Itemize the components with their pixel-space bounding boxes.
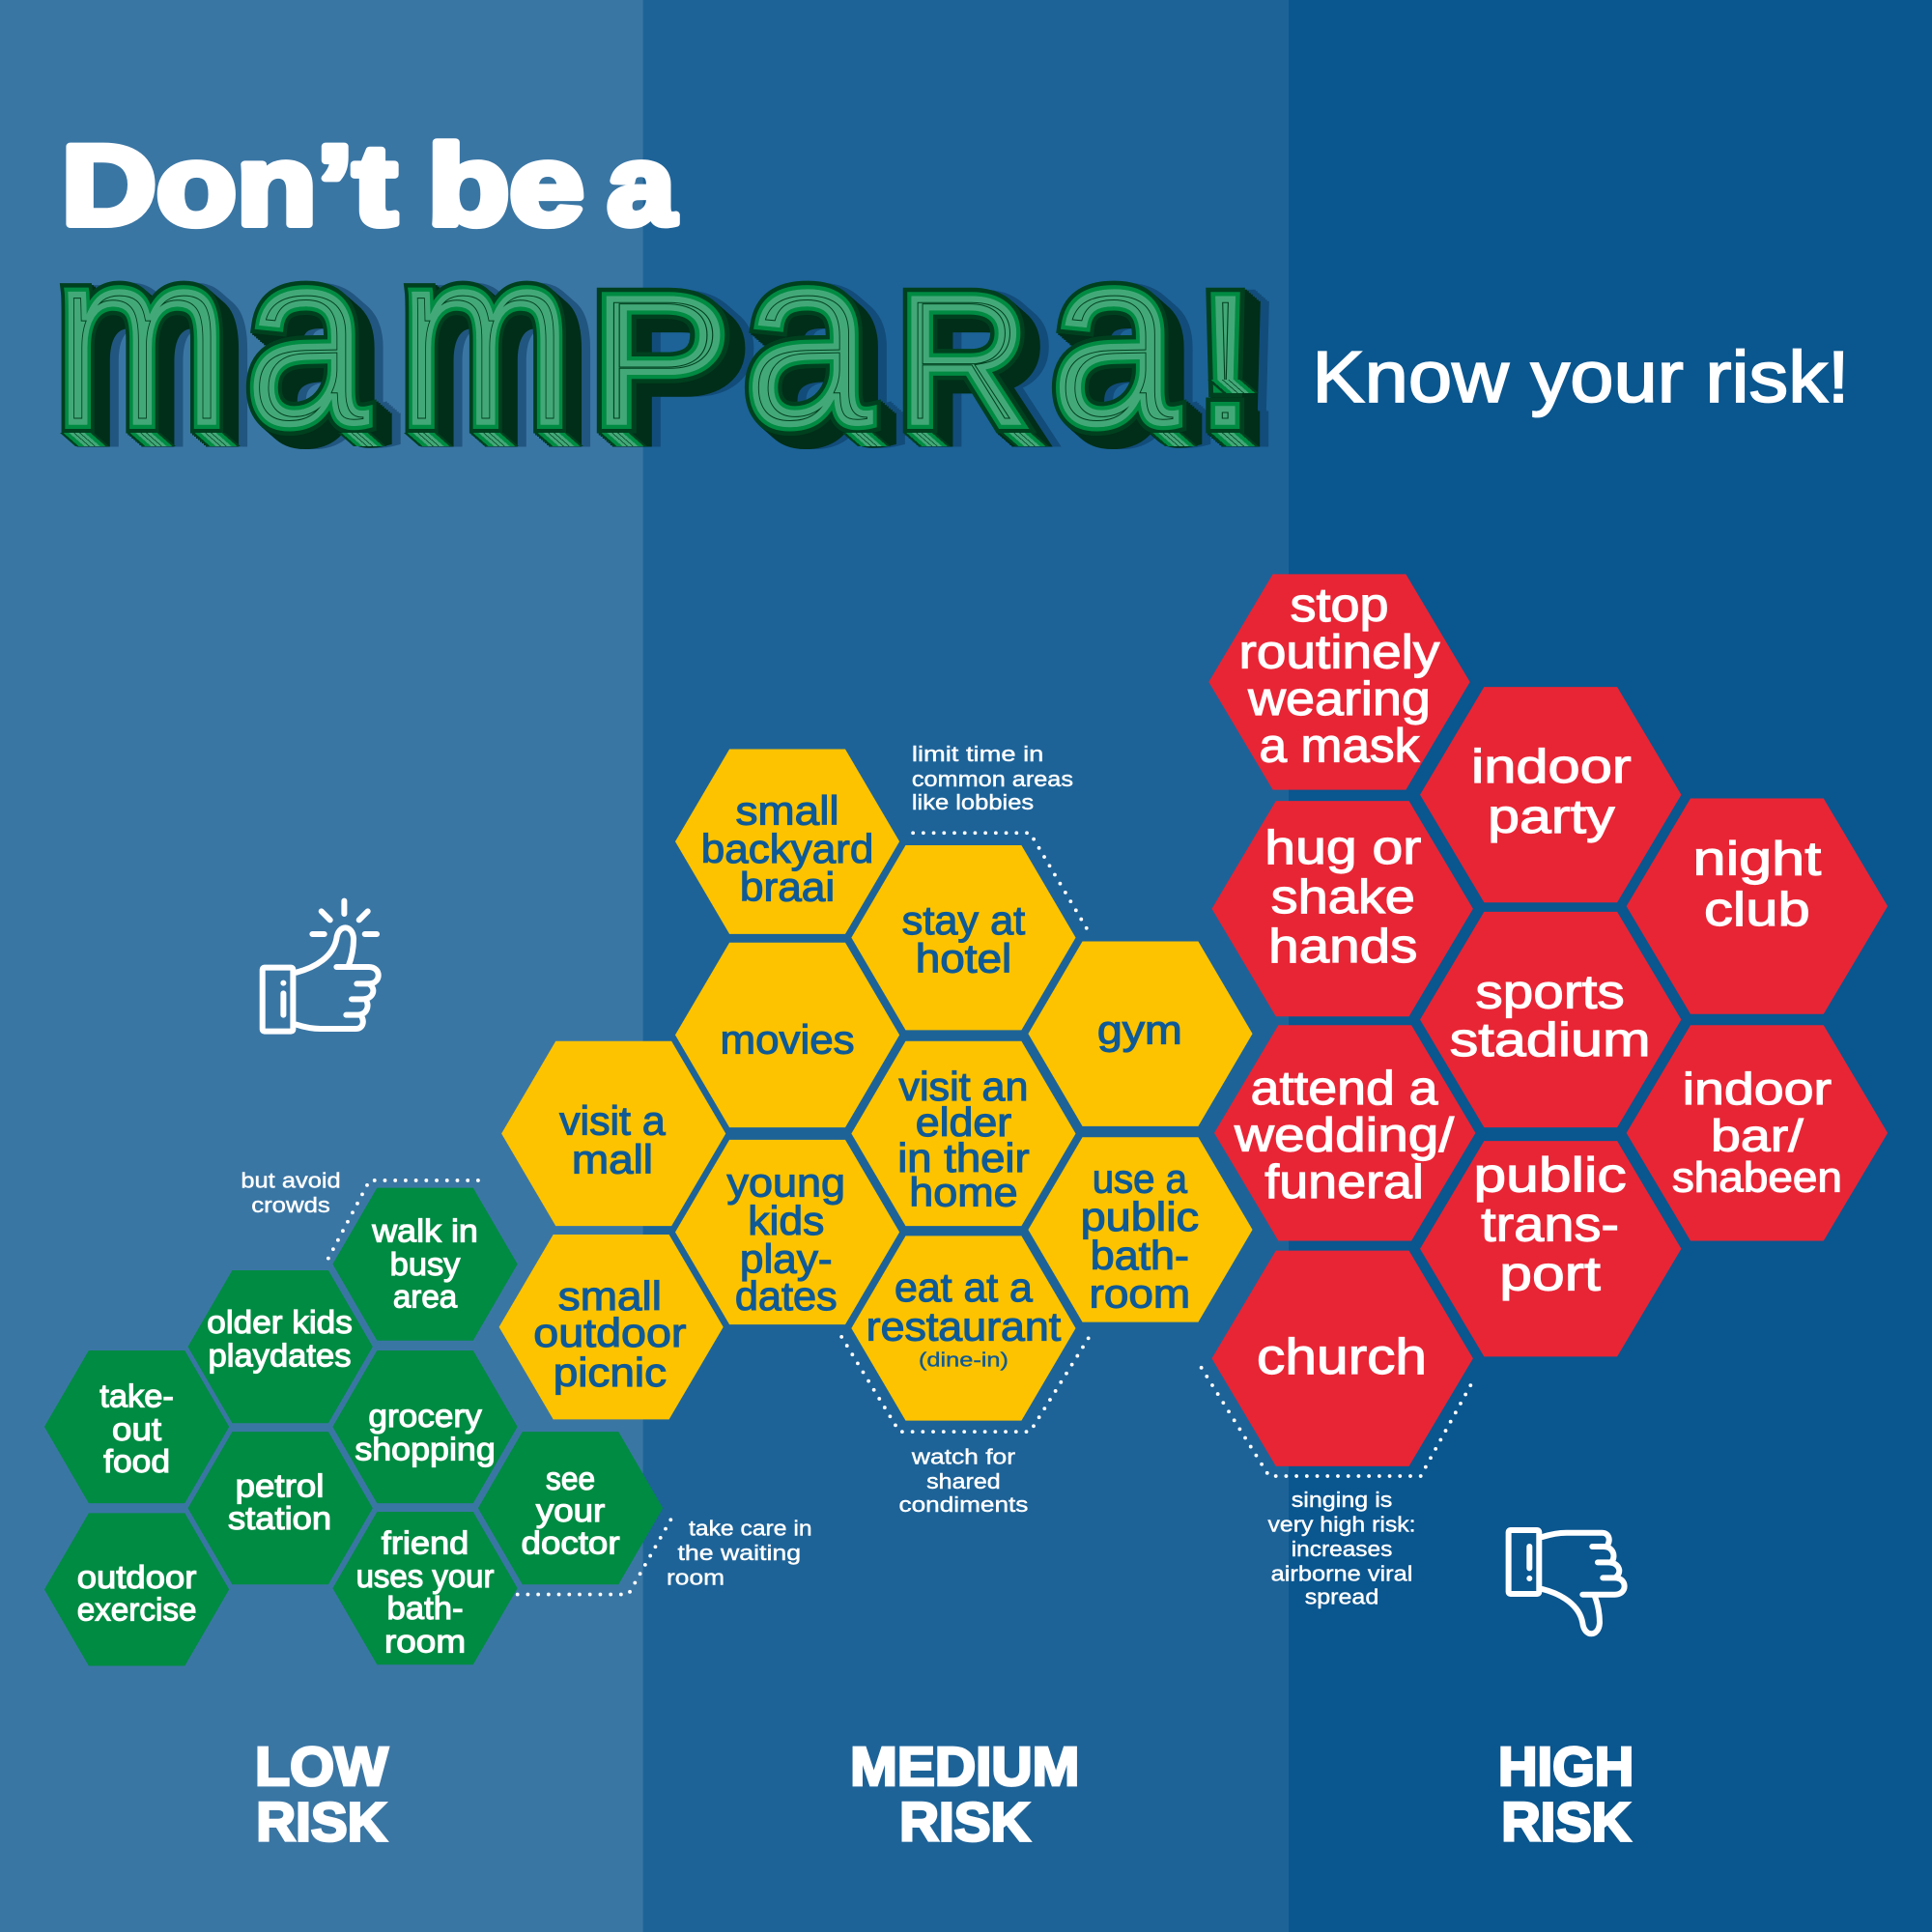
callout: but avoid crowds: crowds: [251, 1193, 330, 1217]
light band over pinstripe: a: [244, 198, 369, 478]
panel: high risk background: [1289, 0, 1932, 1932]
heading: high risk: [1498, 1736, 1634, 1853]
hex: attend a wedding/funeral: [1214, 1025, 1475, 1240]
callout: limit time in common areas: like lobbies: [912, 790, 1034, 814]
hex: outdoor exercise: [44, 1513, 229, 1665]
hex: petrol station: [188, 1432, 373, 1584]
callout: singing is very high risk: increases: [1292, 1537, 1392, 1561]
hex: friend uses your bathroom: room: [384, 1624, 466, 1660]
hex: visit an elder in their home: elder: [916, 1099, 1011, 1145]
hex: stop routinely wearing a mask: stop: [1290, 580, 1388, 632]
letter faces with extrusion and shadow: [60, 280, 1269, 449]
title: MAMPARA! striped lettering: [60, 280, 1269, 449]
light centre band: P: [589, 256, 731, 465]
hex: public transport: trans-: [1481, 1196, 1619, 1251]
hex: stay at hotel: [851, 845, 1076, 1030]
hex: young kids play-dates: young: [727, 1160, 845, 1206]
hex: outdoor exercise: outdoor: [77, 1560, 196, 1596]
hex: older kids playdates: playdates: [209, 1339, 352, 1375]
mid green band: a: [244, 198, 369, 478]
hex: friend uses your bathroom: friend: [382, 1525, 469, 1561]
hex: stay at hotel: stay at: [902, 897, 1026, 943]
hex: small backyard braai: [675, 750, 899, 934]
light centre band: a: [1050, 197, 1179, 478]
outer dark rim: m: [54, 198, 230, 478]
hex: hug or shake hands: hands: [1268, 921, 1417, 973]
heading: medium risk: [850, 1736, 1079, 1853]
mid green band: m: [398, 197, 573, 478]
hex: indoor bar/shabeen: shabeen: [1672, 1154, 1842, 1201]
hex: stop routinely wearing a mask: wearing: [1247, 673, 1431, 725]
outer dark rim: [54, 197, 1254, 478]
hexagon cluster: low risk: [44, 1188, 663, 1665]
hex: eat at a restaurant (dine-in): eat at a: [895, 1264, 1034, 1310]
hex: see your doctor: doctor: [522, 1525, 620, 1561]
hex: visit a mall: mall: [572, 1136, 653, 1181]
mid green band: a: [743, 198, 873, 478]
outer dark rim: a: [743, 198, 873, 478]
callout: limit time in common areas: limit time in: [912, 742, 1043, 766]
dark pinstripe: R: [896, 256, 1030, 465]
hex: sports stadium: stadium: [1450, 1014, 1651, 1066]
heading: low risk: LOW: [255, 1736, 388, 1797]
hex: take-out food: [44, 1350, 229, 1503]
hex: stay at hotel: hotel: [916, 935, 1011, 980]
hex: young kids play-dates: dates: [735, 1273, 838, 1319]
hex: night club: night: [1693, 834, 1822, 886]
callout: but avoid crowds: but avoid: [241, 1169, 341, 1193]
icon: thumbs down: [1509, 1530, 1625, 1634]
hex: walk in busy area: [332, 1188, 518, 1341]
dark pinstripe: a: [1050, 197, 1179, 478]
callout: take care in the waiting room: the waiting: [678, 1541, 801, 1565]
hex: visit an elder in their home: [851, 1041, 1076, 1226]
light centre band: R: [896, 256, 1030, 465]
hex: indoor bar/shabeen: indoor: [1683, 1064, 1832, 1114]
hex: night club: [1627, 799, 1888, 1014]
dark pinstripe: [73, 296, 1229, 421]
hex: hug or shake hands: hug or: [1264, 822, 1421, 874]
dark pinstripe: a: [743, 198, 873, 478]
outer dark rim: m: [398, 197, 573, 478]
light centre band: m: [398, 197, 573, 478]
dark pinstripe: a: [244, 198, 369, 478]
hex: small outdoor picnic: small: [558, 1273, 662, 1319]
title: Don't be a: a: [608, 122, 676, 248]
heading: medium risk: RISK: [899, 1792, 1030, 1853]
heading: medium risk: MEDIUM: [850, 1736, 1079, 1797]
hex: hug or shake hands: shake: [1271, 871, 1415, 923]
hex: outdoor exercise: exercise: [77, 1592, 196, 1628]
hexagon cluster: high risk: [1208, 574, 1888, 1466]
hex: older kids playdates: [188, 1270, 373, 1423]
hex: eat at a restaurant (dine-in): restaurant: [867, 1304, 1062, 1350]
panel: medium risk background: [643, 0, 1289, 1932]
dark pinstripe: m: [398, 197, 573, 478]
hex: use a public bathroom: bath-: [1091, 1233, 1189, 1278]
light band over pinstripe: !: [1197, 255, 1254, 464]
hex: small outdoor picnic: picnic: [554, 1350, 667, 1395]
light centre band: [54, 197, 1254, 478]
hex: indoor party: indoor: [1471, 741, 1632, 793]
light band over pinstripe: R: [896, 256, 1030, 465]
hex: walk in busy area: walk in: [371, 1214, 478, 1250]
light band over pinstripe: m: [398, 197, 573, 478]
callout: singing is very high risk: [1202, 1368, 1475, 1609]
light band over pinstripe: P: [589, 256, 731, 465]
hex: movies: [675, 943, 899, 1127]
callout: watch for shared condiments: watch for: [911, 1444, 1016, 1468]
hex: public transport: port: [1499, 1245, 1601, 1300]
hex: friend uses your bathroom: [332, 1512, 518, 1664]
hex: attend a wedding/funeral: attend a: [1251, 1063, 1438, 1115]
dark pinstripe: !: [1197, 255, 1254, 464]
hex: young kids play-dates: [675, 1140, 899, 1324]
callout: take care in the waiting room: [518, 1512, 812, 1595]
hex: stop routinely wearing a mask: [1208, 574, 1470, 790]
hex: friend uses your bathroom: uses your: [356, 1559, 494, 1595]
callout: limit time in common areas: common areas: [912, 767, 1073, 791]
dark pinstripe: m: [54, 198, 230, 478]
mid green band: R: [896, 256, 1030, 465]
callout: watch for shared condiments: condiments: [898, 1492, 1028, 1517]
hex: church: church: [1257, 1328, 1427, 1384]
hexagon cluster: medium risk: [499, 750, 1253, 1421]
hex: visit an elder in their home: in their: [897, 1135, 1030, 1180]
light band over pinstripe: a: [743, 198, 873, 478]
hex: friend uses your bathroom: bath-: [387, 1591, 464, 1627]
hex: small backyard braai: braai: [740, 864, 835, 909]
callout: singing is very high risk: very high risk:: [1267, 1512, 1416, 1536]
title: Don't be a: [62, 122, 676, 248]
subtitle: Know your risk!: Know your risk!: [1312, 336, 1850, 417]
hex: use a public bathroom: public: [1081, 1194, 1199, 1239]
hex: indoor party: party: [1488, 791, 1615, 843]
outer dark rim: R: [896, 256, 1030, 465]
callout: singing is very high risk: airborne viral: [1271, 1561, 1412, 1585]
mid green band: [54, 197, 1254, 478]
callout: take care in the waiting room: room: [667, 1565, 724, 1589]
hex: see your doctor: see: [546, 1462, 595, 1497]
icon: thumbs up: [263, 901, 379, 1032]
callout: watch for shared condiments: shared: [926, 1469, 1001, 1493]
hex: see your doctor: your: [536, 1493, 605, 1529]
hex: use a public bathroom: [1028, 1137, 1253, 1322]
hex: indoor bar/shabeen: bar/: [1711, 1110, 1804, 1160]
hex: visit an elder in their home: home: [909, 1170, 1018, 1215]
hex: gym: gym: [1097, 1007, 1182, 1052]
light band over pinstripe: m: [54, 198, 230, 478]
hex: young kids play-dates: kids: [748, 1198, 824, 1243]
hex: small backyard braai: small: [735, 787, 839, 833]
light band over pinstripe: a: [1050, 197, 1179, 478]
hex: hug or shake hands: [1211, 801, 1473, 1016]
title: Don't be a: be: [428, 122, 584, 248]
panel: low risk background: [0, 0, 643, 1932]
hex: walk in busy area: area: [393, 1279, 458, 1315]
hex: indoor party: [1420, 687, 1681, 902]
hex: attend a wedding/funeral: funeral: [1264, 1156, 1424, 1208]
hex: petrol station: station: [228, 1501, 331, 1537]
mid green band: P: [589, 256, 731, 465]
hex: older kids playdates: older kids: [207, 1305, 353, 1341]
hex: attend a wedding/funeral: wedding/: [1234, 1109, 1455, 1161]
title: Don't be a: Don’t: [62, 122, 397, 248]
mid green band: m: [54, 198, 230, 478]
thin inner lines: [73, 292, 1229, 421]
hex: movies: movies: [721, 1017, 855, 1063]
hex: visit a mall: [501, 1041, 725, 1226]
hex: eat at a restaurant (dine-in): (dine-in): [919, 1350, 1009, 1372]
heading: low risk: RISK: [256, 1792, 387, 1853]
callout: watch for shared condiments: [841, 1337, 1090, 1517]
outer dark rim: P: [589, 256, 731, 465]
hex: stop routinely wearing a mask: a mask: [1260, 720, 1420, 772]
hex: use a public bathroom: use a: [1093, 1156, 1188, 1202]
callout: singing is very high risk: spread: [1305, 1585, 1378, 1609]
callout: but avoid crowds: [241, 1169, 478, 1262]
hex: night club: club: [1704, 884, 1810, 936]
hex: visit a mall: visit a: [559, 1098, 667, 1144]
hex: walk in busy area: busy: [390, 1247, 461, 1283]
callout: take care in the waiting room: take care in: [689, 1516, 812, 1540]
hex: take-out food: take-: [99, 1379, 174, 1415]
outer dark rim: a: [244, 198, 369, 478]
outer dark rim: a: [1050, 197, 1179, 478]
callout: limit time in common areas: [912, 742, 1090, 933]
hex: grocery shopping: shopping: [355, 1432, 496, 1467]
hex: stop routinely wearing a mask: routinely: [1239, 626, 1440, 678]
hex: sports stadium: sports: [1475, 966, 1625, 1018]
callout: singing is very high risk: singing is: [1292, 1488, 1392, 1512]
hex: sports stadium: [1420, 912, 1681, 1127]
hex: small outdoor picnic: [499, 1235, 724, 1419]
striped bottom faces of letter stems: [60, 380, 1259, 446]
light centre band: m: [54, 198, 230, 478]
hex: church: [1211, 1251, 1473, 1466]
hex: gym: [1028, 941, 1253, 1126]
hex: small backyard braai: backyard: [701, 826, 873, 871]
hex: public transport: [1420, 1141, 1681, 1356]
hex: indoor bar/shabeen: [1627, 1025, 1888, 1240]
outer dark rim: !: [1197, 255, 1254, 464]
heading: high risk: RISK: [1501, 1792, 1631, 1853]
hex: young kids play-dates: play-: [740, 1236, 833, 1282]
light centre band: !: [1197, 255, 1254, 464]
hex: grocery shopping: [332, 1350, 518, 1503]
hex: grocery shopping: grocery: [368, 1399, 482, 1435]
light centre band: a: [244, 198, 369, 478]
hex: eat at a restaurant (dine-in): [851, 1236, 1076, 1421]
hex: petrol station: petrol: [236, 1469, 324, 1505]
hex: take-out food: out: [112, 1412, 161, 1448]
hex: visit an elder in their home: visit an: [898, 1064, 1028, 1109]
mid green band: !: [1197, 255, 1254, 464]
heading: high risk: HIGH: [1498, 1736, 1634, 1797]
dark pinstripe: P: [589, 256, 731, 465]
light centre band: a: [743, 198, 873, 478]
mid green band: a: [1050, 197, 1179, 478]
heading: low risk: [255, 1736, 388, 1853]
hex: small outdoor picnic: outdoor: [533, 1310, 687, 1355]
hex: public transport: public: [1474, 1147, 1627, 1202]
hex: use a public bathroom: room: [1090, 1270, 1190, 1316]
hex: see your doctor: [478, 1432, 663, 1584]
light band over pinstripe: [68, 290, 1236, 427]
hex: take-out food: food: [103, 1444, 170, 1480]
